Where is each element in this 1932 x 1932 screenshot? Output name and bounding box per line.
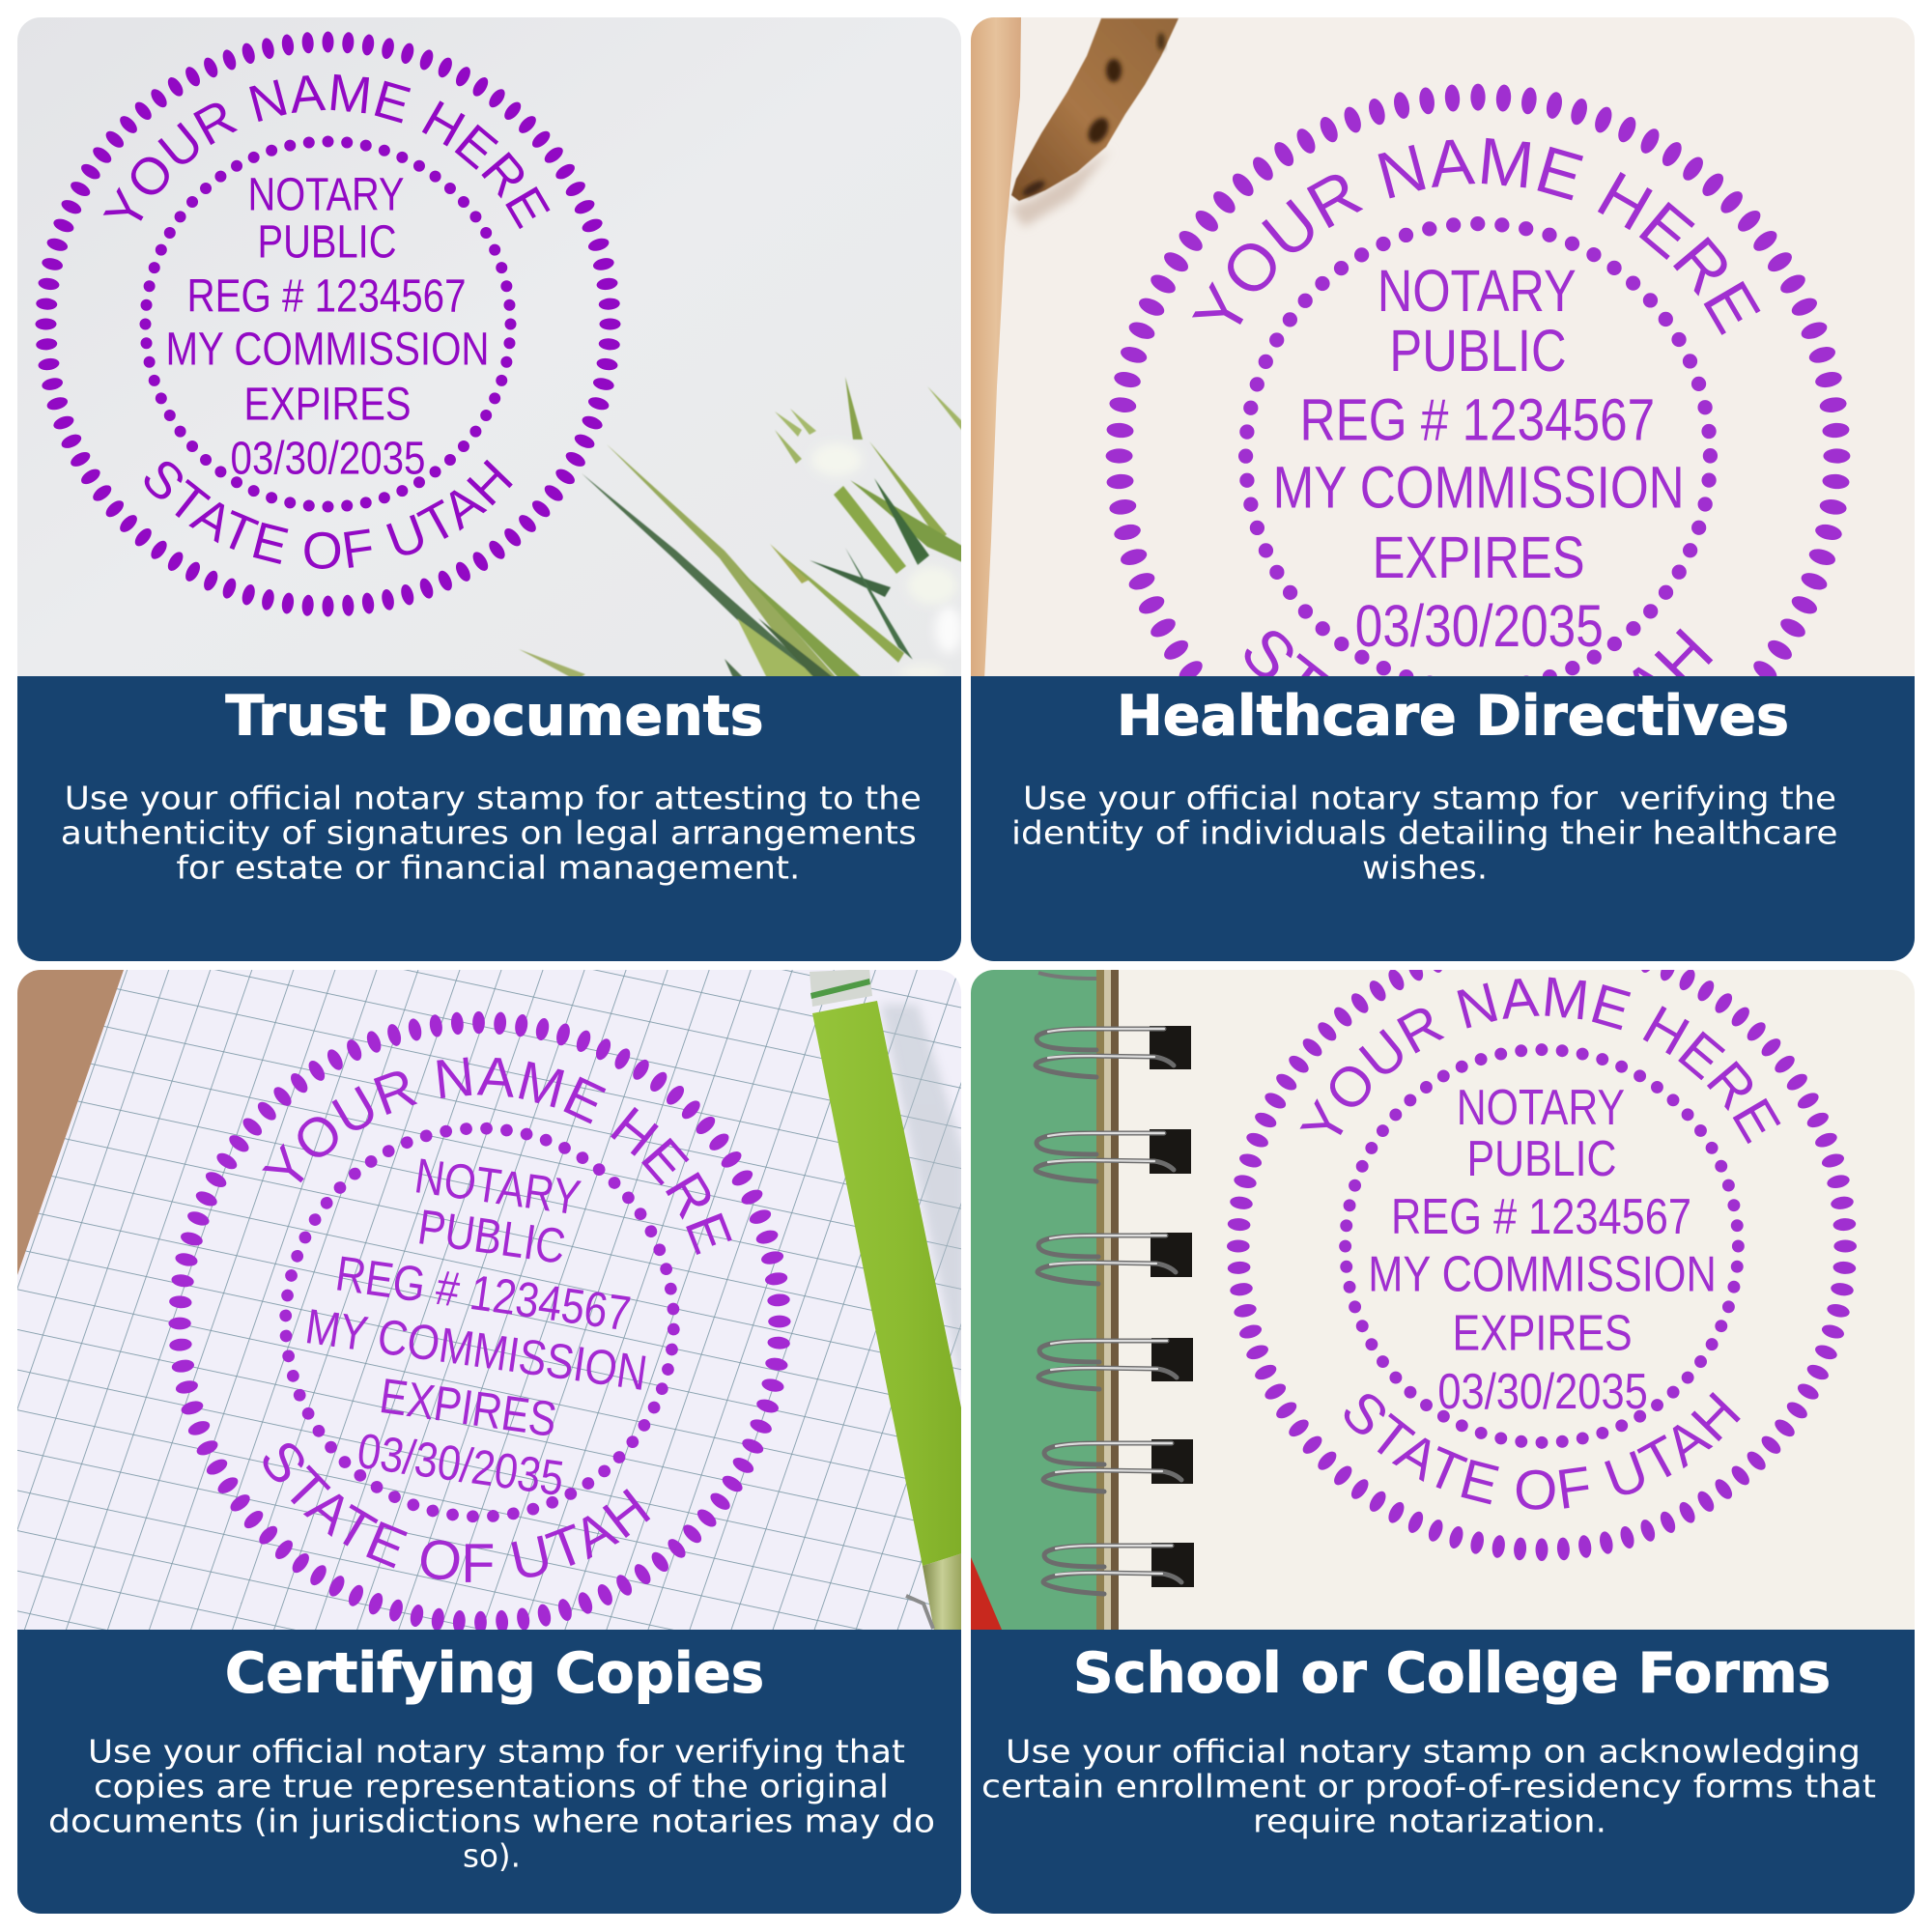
stamp: Utah notary seal 1: EXPIRES (243, 379, 412, 431)
stamp: Utah notary seal 4: STATE OF UTAH (1345, 1392, 1741, 1510)
stamp: Utah notary seal 1: NOTARY (247, 170, 404, 220)
description: Use your official notary stamp on acknowledging (1006, 1733, 1861, 1770)
stamp: Utah notary seal 4: YOUR NAME HERE (1300, 978, 1781, 1144)
stamp: Utah notary seal 4: REG # 1234567 (1391, 1188, 1691, 1244)
description (981, 1733, 1876, 1839)
description: for estate or financial management. (176, 848, 800, 887)
stamp: Utah notary seal 2: STATE OF UTAH (1244, 628, 1714, 676)
description (1014, 784, 1836, 879)
photo: grid paper with green pen (17, 969, 966, 1636)
description: wishes. (1362, 848, 1488, 887)
description: require notarization. (1253, 1803, 1606, 1839)
photo: white surface with plants (17, 17, 962, 684)
stamp: Utah notary seal 4: NOTARY (1457, 1079, 1625, 1135)
stamp: Utah notary seal 3 (rotated): PUBLIC (414, 1199, 569, 1274)
icon: spiral binding rings (1036, 973, 1194, 1594)
stamp: Utah notary seal 1 (35, 31, 620, 616)
description: Use your official notary stamp for attesting to the (65, 779, 922, 817)
stamp: Utah notary seal 2: EXPIRES (1373, 525, 1585, 590)
stamp: Utah notary seal 3 (rotated) (168, 1010, 791, 1630)
stamp: Utah notary seal 1: STATE OF UTAH (145, 460, 513, 569)
panel: school or college forms (971, 970, 1915, 1914)
stamp: Utah notary seal 3 (rotated): STATE OF UTAH (263, 1443, 651, 1582)
stamp: Utah notary seal 4 (1227, 970, 1857, 1561)
stamp: Utah notary seal 3 (rotated): EXPIRES (377, 1368, 560, 1447)
heading: School or College Forms (1073, 1642, 1831, 1706)
stamp: Utah notary seal 2: 03/30/2035 (1355, 593, 1604, 659)
stamp: Utah notary seal 4: EXPIRES (1452, 1305, 1633, 1361)
description: Use your official notary stamp for verifying the (1023, 779, 1836, 817)
photo: spiral notebook (971, 970, 1915, 1636)
description: documents (in jurisdictions where notaries may do (48, 1803, 935, 1839)
stamp: Utah notary seal 2: PUBLIC (1389, 318, 1567, 384)
panel: certifying copies (17, 970, 961, 1914)
stamp: Utah notary seal 1: MY COMMISSION (166, 325, 489, 375)
stamp: Utah notary seal 3 (rotated): MY COMMISSION (302, 1298, 650, 1401)
stamp: Utah notary seal 4: PUBLIC (1467, 1130, 1616, 1186)
stamp: Utah notary seal 3 (rotated): YOUR NAME HERE (262, 1057, 732, 1255)
caption band (971, 1630, 1915, 1914)
stamp: Utah notary seal 1: 03/30/2035 (230, 433, 425, 485)
stamp: Utah notary seal 4: 03/30/2035 (1437, 1363, 1648, 1419)
stamp: Utah notary seal 3 (rotated): 03/30/2035 (355, 1423, 567, 1506)
stamp: Utah notary seal 1: PUBLIC (257, 216, 396, 269)
heading: Healthcare Directives (1117, 684, 1789, 748)
description: Use your official notary stamp for verifying that (88, 1733, 905, 1770)
stamp: Utah notary seal 2 (1105, 83, 1851, 676)
panel: trust documents (17, 17, 961, 961)
stamp: Utah notary seal 1: REG # 1234567 (187, 270, 466, 323)
description: so). (463, 1837, 521, 1874)
stamp: Utah notary seal 3 (rotated): NOTARY (412, 1148, 583, 1226)
caption band (971, 676, 1915, 961)
caption band (17, 1630, 961, 1914)
description: copies are true representations of the original (94, 1768, 889, 1804)
stamp: Utah notary seal 4: MY COMMISSION (1368, 1245, 1717, 1301)
stamp: Utah notary seal 1: YOUR NAME HERE (102, 73, 551, 230)
stamp: Utah notary seal 3 (rotated): REG # 1234567 (332, 1245, 634, 1342)
heading: Certifying Copies (225, 1642, 764, 1706)
description: authenticity of signatures on legal arrangements (61, 813, 917, 852)
panel: healthcare directives (971, 17, 1915, 961)
heading: Trust Documents (226, 684, 763, 748)
stamp: Utah notary seal 2: YOUR NAME HERE (1192, 137, 1760, 335)
photo: cream paper with wood (971, 17, 1915, 684)
caption band (17, 676, 961, 961)
stamp: Utah notary seal 2: REG # 1234567 (1300, 386, 1655, 452)
stamp: Utah notary seal 2: MY COMMISSION (1273, 454, 1685, 520)
description: identity of individuals detailing their healthcare (1011, 813, 1837, 852)
stamp: Utah notary seal 2: NOTARY (1378, 258, 1577, 324)
description (48, 1733, 935, 1874)
description: certain enrollment or proof-of-residency forms that (981, 1768, 1876, 1804)
description (61, 779, 922, 887)
